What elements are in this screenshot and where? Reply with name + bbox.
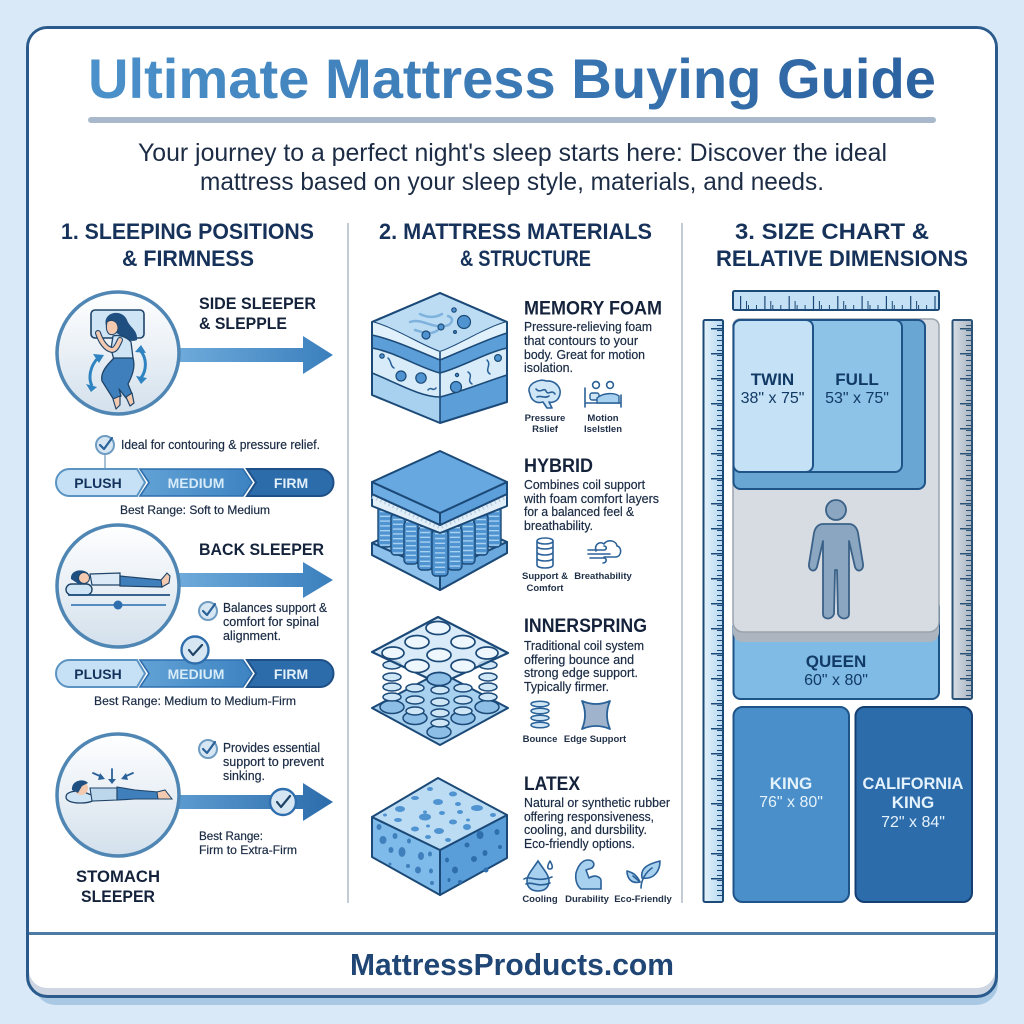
text: memory foam: body. Great for motion [524, 348, 645, 362]
king mattress: KING [770, 774, 812, 793]
text: innerspring: Traditional coil system [524, 639, 644, 653]
icon: durability [565, 860, 610, 905]
text: memory foam: Pressure-relieving foam [524, 320, 652, 334]
callout: back sleeper benefit [199, 601, 328, 643]
arrow: stomach sleeper [176, 783, 333, 821]
text: latex: Eco-friendly options. [524, 837, 635, 851]
firmness scale: side sleeper: FIRM [274, 475, 308, 491]
heading: size chart [716, 219, 968, 271]
best range: back sleeper: Best Range: Medium to Medium-Firm [94, 694, 296, 708]
icon: motion isolation: Motion [587, 413, 619, 424]
icon: bounce [523, 701, 557, 745]
subtitle [138, 139, 887, 196]
heading: sleeping positions [61, 219, 314, 271]
text: hybrid: Combines coil support [524, 478, 646, 492]
icon: support and comfort: Support & [522, 571, 568, 582]
icon: edge support: Edge Support [564, 734, 627, 745]
callout: back sleeper benefit: alignment. [223, 629, 281, 643]
column dividers [348, 223, 682, 903]
arrow: side sleeper [176, 336, 333, 374]
king mattress: 76" x 80" [759, 794, 823, 811]
best range: stomach sleeper: Firm to Extra-Firm [199, 843, 297, 857]
twin mattress: TWIN [751, 370, 794, 389]
firmness scale: back sleeper: MEDIUM [168, 666, 224, 682]
callout: side sleeper benefit: Ideal for contouring & pressure relief. [121, 438, 320, 452]
best range: stomach sleeper [199, 829, 297, 857]
illustration: latex block [372, 778, 507, 895]
text: memory foam: that contours to your [524, 334, 638, 348]
queen mattress [733, 319, 939, 699]
callout: stomach sleeper benefit [199, 740, 325, 783]
label: back sleeper: BACK SLEEPER [199, 540, 324, 559]
firmness scale: back sleeper: FIRM [274, 666, 308, 682]
text: innerspring [524, 616, 647, 694]
best range: stomach sleeper: Best Range: [199, 829, 263, 843]
text: hybrid: breathability. [524, 519, 593, 533]
title underline [88, 117, 936, 123]
text: innerspring: INNERSPRING [524, 616, 647, 637]
title: Ultimate Mattress Buying Guide [88, 47, 936, 110]
footer brand: MattressProducts.com [350, 947, 674, 982]
callout: stomach sleeper benefit: support to prevent [223, 755, 325, 769]
queen mattress: 60" x 80" [804, 672, 868, 689]
full mattress: 53" x 75" [825, 390, 889, 407]
subtitle: Your journey to a perfect night's sleep starts here: Discover the ideal [138, 139, 887, 167]
icon: breathability: Breathability [574, 571, 632, 582]
panel: sleeping positions [56, 219, 334, 906]
king mattress [734, 707, 849, 902]
icon: motion isolation: Iselstlen [584, 424, 622, 435]
label: stomach sleeper: SLEEPER [81, 887, 155, 906]
icon: breathability [574, 541, 632, 582]
heading: materials: & STRUCTURE [460, 246, 591, 271]
icon: edge support [564, 701, 627, 745]
panel: mattress materials [372, 219, 672, 905]
text: innerspring: strong edge support. [524, 666, 638, 680]
text: memory foam: isolation. [524, 361, 573, 375]
heading: materials: 2. MATTRESS MATERIALS [379, 219, 652, 244]
text: latex: LATEX [524, 774, 580, 795]
text: latex: cooling, and dursbility. [524, 823, 647, 837]
icon: support and comfort [522, 538, 568, 594]
firmness scale: side sleeper [56, 469, 334, 496]
label: stomach sleeper [76, 867, 160, 906]
icon: side sleeper circle [57, 292, 179, 414]
text: hybrid [523, 456, 659, 533]
california king mattress: CALIFORNIA [862, 774, 964, 793]
label: side sleeper [199, 294, 316, 333]
heading: size chart: 3. SIZE CHART & [735, 219, 929, 244]
icon: cooling: Cooling [522, 894, 558, 905]
firmness scale: back sleeper: PLUSH [74, 666, 122, 682]
icon: motion isolation [584, 382, 622, 435]
text: latex [524, 774, 670, 851]
text: hybrid: HYBRID [524, 456, 593, 477]
illustration: memory foam block [372, 293, 507, 423]
text: latex: Natural or synthetic rubber [524, 796, 670, 810]
callout: stomach sleeper benefit: Provides essential [223, 741, 320, 755]
icon: stomach sleeper circle [57, 734, 179, 856]
full mattress: FULL [835, 370, 879, 389]
icon: eco-friendly [614, 861, 672, 905]
text: hybrid: with foam comfort layers [523, 492, 659, 506]
icon: pressure relief [525, 380, 565, 435]
icon: cooling [522, 861, 558, 905]
ruler: left [704, 320, 723, 902]
california king mattress: KING [892, 793, 934, 812]
label: stomach sleeper: STOMACH [76, 867, 160, 886]
illustration: innerspring [372, 617, 508, 745]
callout: back sleeper benefit: Balances support & [223, 601, 328, 615]
arrow: back sleeper [176, 562, 333, 598]
text: hybrid: for a balanced feel & [524, 505, 635, 519]
full outer layer [734, 320, 925, 489]
text: innerspring: Typically firmer. [524, 680, 609, 694]
twin mattress [734, 320, 813, 472]
text: memory foam [524, 298, 662, 375]
icon: pressure relief: Rslief [532, 424, 559, 435]
icon: bounce: Bounce [523, 734, 557, 745]
text: memory foam: MEMORY FOAM [524, 298, 662, 320]
callout: side sleeper benefit [96, 436, 320, 469]
icon: back sleeper circle [57, 525, 179, 647]
firmness scale: side sleeper: MEDIUM [168, 475, 224, 491]
heading: sleeping positions: & FIRMNESS [122, 246, 254, 271]
heading: materials [379, 219, 652, 271]
twin mattress: 38" x 75" [741, 390, 804, 407]
callout: stomach sleeper benefit: sinking. [223, 769, 265, 783]
illustration: hybrid block [372, 451, 507, 590]
icon: eco-friendly: Eco-Friendly [614, 894, 672, 905]
icon: durability: Durability [565, 894, 610, 905]
text: innerspring: offering bounce and [524, 653, 634, 667]
icon: support and comfort: Comfort [527, 583, 564, 594]
callout: back sleeper benefit: comfort for spinal [223, 615, 319, 629]
full mattress [734, 320, 902, 472]
text: latex: offering responsiveness, [524, 810, 654, 824]
subtitle: mattress based on your sleep style, materials, and needs. [200, 168, 824, 196]
best range: side sleeper: Best Range: Soft to Medium [120, 503, 270, 517]
california king mattress: 72" x 84" [881, 814, 945, 831]
firmness scale: back sleeper [56, 636, 334, 687]
panel: size chart [704, 219, 972, 902]
ruler: right [952, 320, 972, 699]
queen mattress: QUEEN [806, 652, 866, 671]
label: side sleeper: & SLEPPLE [199, 314, 287, 333]
ruler: top [733, 291, 939, 310]
footer divider [29, 932, 995, 935]
firmness scale: side sleeper: PLUSH [74, 475, 122, 491]
label: side sleeper: SIDE SLEEPER [199, 294, 316, 313]
icon: pressure relief: Pressure [525, 413, 565, 424]
california king mattress [856, 707, 972, 902]
heading: sleeping positions: 1. SLEEPING POSITIONS [61, 219, 314, 244]
icon: person [809, 500, 863, 618]
heading: size chart: RELATIVE DIMENSIONS [716, 246, 968, 271]
